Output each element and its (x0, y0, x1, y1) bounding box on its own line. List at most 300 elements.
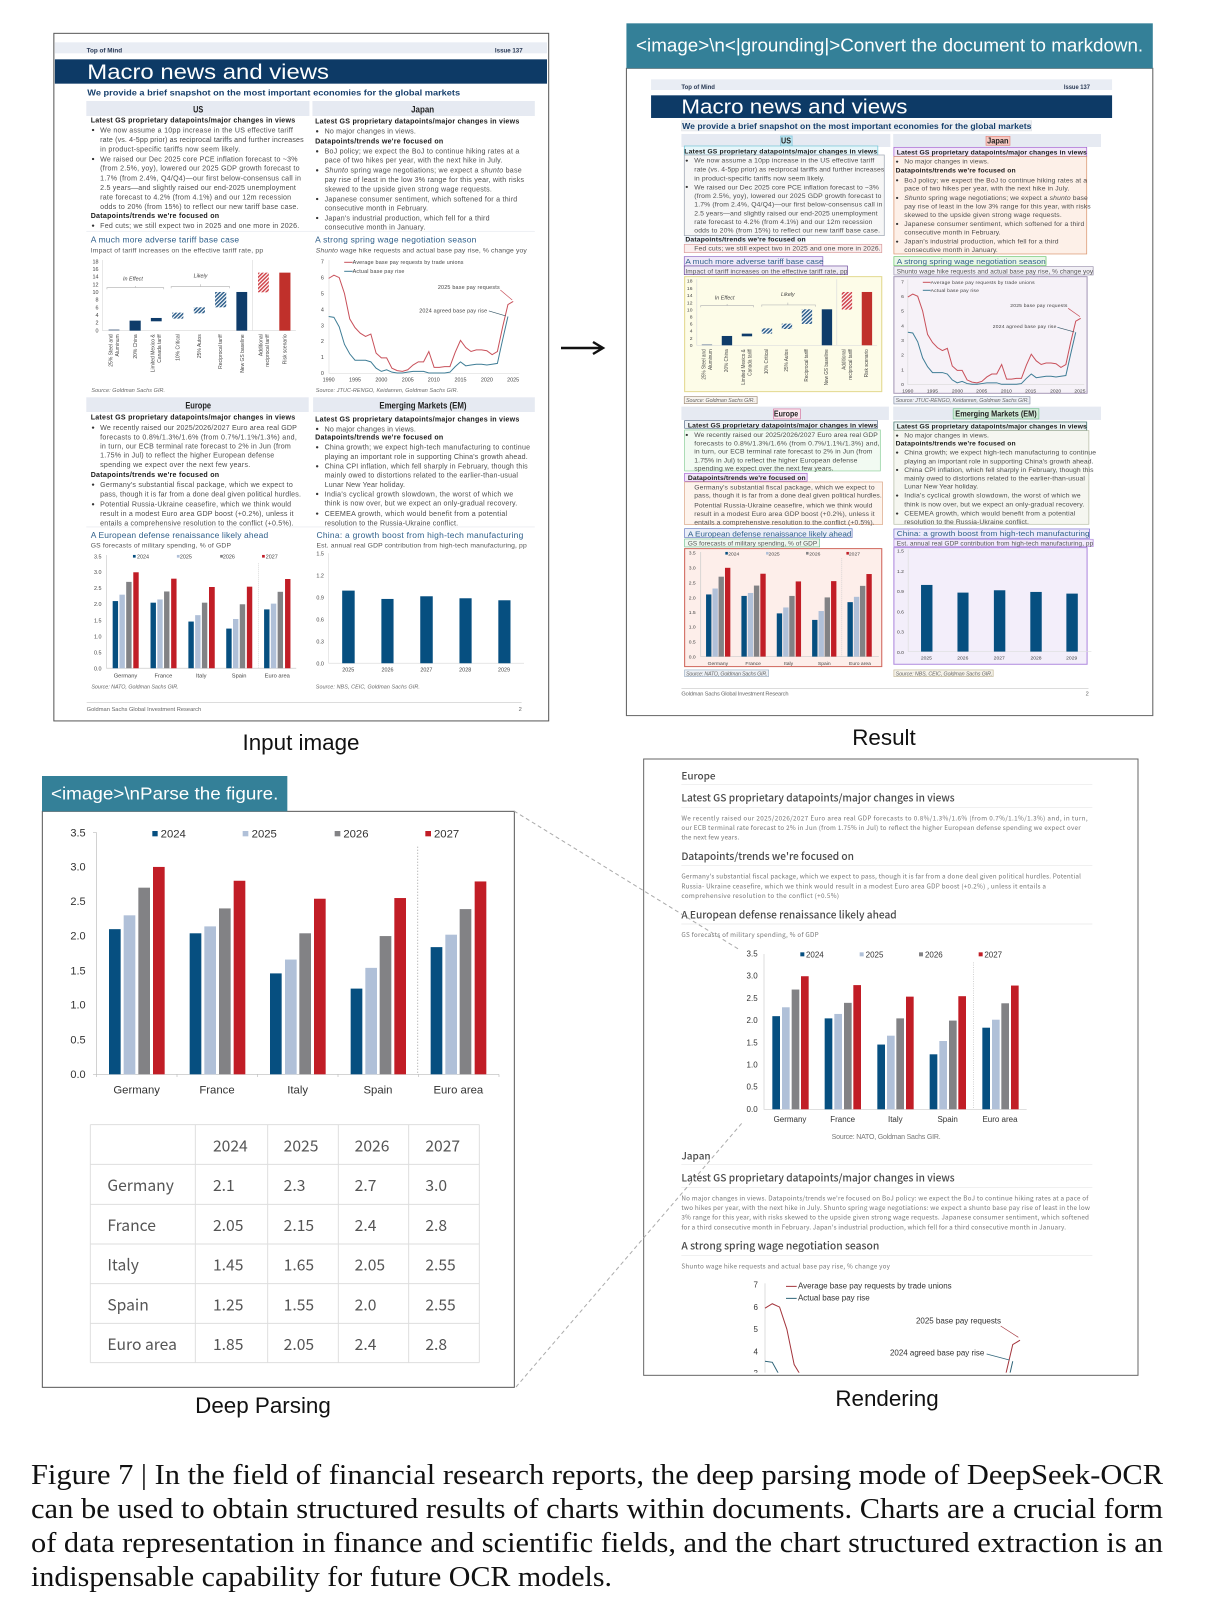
chart: European defense spending (91, 554, 296, 691)
chart: shunto wage line chart: 3 (321, 323, 324, 329)
grounding box: tariff chart: Aluminum (708, 349, 714, 370)
text block: Emerging Markets views: No major changes in views. (325, 426, 416, 433)
panel: result with grounding boxes: 2 (1086, 692, 1089, 698)
rendered bar chart: defense spending: Euro area (982, 1115, 1018, 1124)
text block: US views: odds to 20% (from 15%) to reflect our new tariff base case. (100, 204, 299, 211)
rendered bar chart: defense spending: 2026 (925, 950, 943, 959)
bar chart: military spending by country: 1.0 (70, 1000, 86, 1012)
chart: European defense spending: France (154, 673, 172, 679)
grounding box: wage line chart (894, 277, 1087, 394)
text block: Emerging Markets views: CEEMEA growth, which would benefit from a potential (325, 511, 508, 518)
chart: European defense spending: 3.5 (94, 554, 102, 560)
chart: tariff base case: 8 (95, 298, 98, 304)
panel: result with grounding boxes (626, 23, 1153, 716)
bar chart: military spending by country: 2025 (252, 829, 277, 841)
chart: tariff base case: 2 (95, 321, 98, 327)
grounding boxes: Emerging Markets text: mainly owed to distortions related to the earlier-than-usual (904, 475, 1085, 482)
chart: shunto wage line chart: 2000 (375, 377, 387, 383)
chart: European defense spending: 1.5 (94, 618, 102, 624)
rendered section: Japan: for a third consecutive month in February. Japan's industrial production, which fell for a third consecutive month in January. (681, 1222, 1066, 1231)
grounding boxes: US text: rate (vs. 4-5pp prior) as reciprocal tariffs and further increases (694, 166, 885, 173)
figure caption: indispensable capability for future OCR models. (31, 1562, 612, 1593)
rendered line chart: wage negotiations (cropped) (754, 1282, 1020, 1373)
chart: shunto wage line chart: 6 (321, 276, 324, 282)
panel: input image document: Japan (411, 104, 434, 114)
rendered bar chart: defense spending: 1.5 (747, 1038, 758, 1047)
grounding boxes: US text: 2.5 years—and slightly raised our end-2025 unemployment (694, 210, 878, 217)
rendered section: Japan: No major changes in views. Datapoints/trends we're focused on BoJ policy: we expect the BoJ to continue hiking rates at a pace of (681, 1193, 1089, 1202)
chart: shunto wage line chart: 2005 (402, 377, 414, 383)
text block: Emerging Markets views: resolution to the Russia-Ukraine conflict. (325, 520, 458, 527)
rendered section: Europe: We recently raised our 2025/2026/2027 Euro area real GDP forecasts to 0.8%/1.3%/1.6% (from 0.7%/1.1%/1.3%) and, in turn, (681, 813, 1088, 822)
grounding box: tariff chart: 14 (687, 293, 693, 299)
text block: US views: Fed cuts; we still expect two in 2025 and one more in 2026. (100, 223, 299, 230)
grounding boxes: Europe text: GS forecasts of military spending, % of GDP (688, 540, 817, 547)
chart: China high-tech GDP contribution: 2027 (420, 668, 432, 674)
chart: tariff base case: New GS baseline (240, 334, 246, 373)
chart: tariff base case: 20% China (133, 334, 139, 359)
text block: US views (91, 118, 304, 230)
chart: tariff base case: Source: Goldman Sachs GIR. (91, 388, 165, 394)
grounding boxes: US text: 1.7% (from 2.4%, Q4/Q4)—our first below-consensus call in (694, 202, 883, 209)
table: parsed chart values: 2025 (284, 1134, 318, 1157)
grounding box: wage line chart: 6 (901, 294, 904, 300)
chart: tariff base case: Aluminum (115, 334, 121, 356)
panel: result with grounding boxes: US (781, 136, 791, 146)
table: parsed chart values: 1.65 (284, 1253, 314, 1276)
text block: Japan views: Datapoints/trends we're focused on (315, 138, 443, 145)
grounding boxes: US text: A much more adverse tariff base case (685, 257, 824, 266)
table: parsed chart values: France (107, 1213, 156, 1236)
chart: tariff base case: 16 (92, 267, 98, 273)
panel: input image document: Shunto wage hike requests and actual base pay rise, % change yoy (316, 247, 527, 254)
grounding boxes: Japan text (894, 147, 1094, 275)
chart: European defense spending: 0.0 (94, 666, 102, 672)
rendered section: Europe: Russia- Ukraine ceasefire, which we think would result in a modest Euro area GDP boost (+0.2%) , unless it entails a (681, 881, 1046, 890)
panel: input image document: Europe (185, 400, 211, 410)
caption: Rendering: Rendering (835, 1386, 939, 1411)
grounding boxes: US text: in product-specific tariffs now seem likely. (694, 175, 825, 182)
chart: shunto wage line chart: 4 (321, 307, 324, 313)
bar chart: military spending by country: Italy (287, 1085, 308, 1097)
panel: result with grounding boxes: Goldman Sachs Global Investment Research (681, 692, 789, 698)
grounding boxes: Europe text: Datapoints/trends we're focused on (688, 475, 806, 482)
table: parsed chart values: 2024 (213, 1134, 248, 1157)
grounding box: tariff chart: Reciprocal tariff (804, 349, 810, 382)
chart: European defense spending: 0.5 (94, 650, 102, 656)
panel: result with grounding boxes: Emerging Markets (EM) (955, 409, 1037, 419)
panel: result with grounding boxes: Issue 137 (1064, 84, 1090, 91)
text block: Europe views: 1.75% in Jul) to reflect the higher European defense (100, 453, 274, 460)
chart: shunto wage line chart: 7 (321, 260, 324, 266)
chart: tariff base case: 6 (95, 305, 98, 311)
chart: tariff base case: 12 (92, 282, 98, 288)
bar chart: military spending by country: 2.0 (70, 931, 86, 943)
grounding boxes: Japan text: Shunto spring wage negotiations; we expect a shunto base (904, 195, 1088, 202)
table: parsed chart values: 2.8 (425, 1332, 447, 1355)
chart: China high-tech GDP contribution: 2028 (459, 668, 471, 674)
text block: Japan views: BoJ policy; we expect the BoJ to continue hiking rates at a (325, 149, 519, 156)
grounding boxes: Japan text: consecutive month in February. (904, 229, 1001, 236)
grounding boxes: Emerging Markets text: playing an important role in supporting China's growth ahead. (904, 458, 1094, 465)
rendered section: Japan: Japan (681, 1147, 711, 1162)
grounding box: wage line chart: 2005 (976, 388, 988, 394)
grounding boxes: Japan text: consecutive month in January. (904, 247, 998, 254)
grounding box: tariff chart: 12 (687, 300, 693, 306)
text block: Emerging Markets views: Datapoints/trends we're focused on (315, 435, 443, 442)
bar chart: military spending by country: Spain (364, 1085, 392, 1097)
chart: shunto wage line chart: 2025 base pay requests (438, 285, 500, 291)
chart: tariff base case: Likely (194, 273, 208, 279)
chart: China high-tech GDP contribution: 0.3 (316, 639, 324, 645)
grounding box: European defense chart: 3.5 (689, 551, 696, 557)
bar chart: military spending by country: 3.5 (70, 827, 86, 839)
caption: Input image: Input image (242, 730, 360, 755)
panel: result with grounding boxes: Source: NATO, Goldman Sachs GIR. (686, 671, 767, 677)
grounding box: China chart: 0.3 (897, 630, 904, 636)
grounding box: wage line chart: 2015 (1025, 388, 1037, 394)
bar chart: military spending by country: 3.0 (70, 861, 86, 873)
chart: China high-tech GDP contribution: 2026 (381, 668, 393, 674)
grounding boxes: Japan text: Shunto wage hike requests and actual base pay rise, % change yoy (897, 268, 1094, 275)
table: parsed chart values: 2.7 (355, 1173, 376, 1196)
grounding boxes: US text: odds to 20% (from 15%) to reflect our new tariff base case. (694, 228, 880, 235)
text block: US views: Latest GS proprietary datapoints/major changes in views (91, 118, 295, 125)
chart: European defense spending: Euro area (265, 673, 291, 679)
text block: Emerging Markets views: China CPI inflation, which fell sharply in February, though this (325, 464, 528, 471)
chart: shunto wage line chart: 5 (321, 291, 324, 297)
grounding boxes: Emerging Markets text: No major changes in views. (904, 433, 989, 440)
rendered section: Europe: Datapoints/trends we're focused on (681, 848, 854, 863)
text block: Europe views: Potential Russia-Ukraine ceasefire, which we think would (100, 502, 291, 509)
grounding box: tariff chart: 25% Autos (784, 349, 790, 372)
rendered bar chart: defense spending: Source: NATO, Goldman Sachs GIR. (832, 1134, 941, 1141)
rendered bar chart: defense spending: 2.0 (747, 1016, 758, 1025)
table: parsed chart values: Italy (107, 1253, 139, 1276)
text block: US views: We now assume a 10pp increase in the US effective tariff (100, 127, 293, 134)
text block: Emerging Markets views: playing an important role in supporting China's growth ahead. (325, 454, 528, 461)
chart: tariff base case: Reciprocal tariff (218, 334, 224, 369)
panel: input image document: Goldman Sachs Global Investment Research (87, 707, 201, 713)
rendered bar chart: defense spending: 3.5 (747, 950, 758, 959)
rendered bar chart: defense spending: 0.5 (747, 1083, 758, 1092)
chart: shunto wage line chart: 2 (321, 339, 324, 345)
grounding box: wage line chart: 4 (901, 323, 904, 329)
rendered bar chart: defense spending: 1.0 (747, 1060, 758, 1069)
bar chart: military spending by country: 1.5 (70, 965, 86, 977)
table: parsed chart values: 2.3 (284, 1173, 305, 1196)
grounding boxes: US text: We raised our Dec 2025 core PCE inflation forecast to ~3% (694, 184, 879, 191)
panel: rendering output (644, 759, 1138, 1440)
grounding box: European defense chart: 2026 (809, 551, 821, 557)
rendered line chart: wage negotiations (cropped): Actual base pay rise (798, 1294, 870, 1303)
chart: European defense spending: Italy (196, 673, 207, 679)
figure caption: of data representation in finance and scientific fields, and the chart structured extraction is an (31, 1528, 1163, 1559)
grounding box: wage line chart: Actual base pay rise (931, 288, 979, 294)
chart: shunto wage line chart: 0 (321, 371, 324, 377)
text block: Emerging Markets views: mainly owed to distortions related to the earlier-than-usual (325, 473, 518, 480)
chart: shunto wage line chart: 1995 (349, 377, 361, 383)
rendered section: Japan: 3% range for this year, with risks skewed to the upside given strong wage requests. Japanese consumer sentiment, which softened (681, 1213, 1089, 1222)
chart: tariff base case: 0 (95, 328, 98, 334)
panel: result with grounding boxes: Europe (774, 409, 798, 419)
grounding boxes: Europe text (685, 421, 882, 547)
chart: tariff base case: 14 (92, 275, 98, 281)
table: parsed chart values (90, 1125, 479, 1363)
text block: Japan views: Japan's industrial production, which fell for a third (325, 215, 490, 222)
chart: China high-tech GDP contribution: 1.2 (316, 573, 324, 579)
grounding box: China chart: 1.2 (897, 569, 904, 575)
bar chart: military spending by country: 2.5 (70, 896, 86, 908)
bar chart: military spending by country: Germany (113, 1085, 160, 1097)
chart: tariff base case: reciprocal tariff (265, 334, 271, 367)
grounding boxes: Emerging Markets text: Latest GS proprietary datapoints/major changes in views (897, 424, 1087, 431)
grounding boxes: US text: We now assume a 10pp increase in the US effective tariff (694, 158, 874, 165)
table: parsed chart values: 2.0 (355, 1292, 376, 1315)
grounding boxes: Europe text: entails a comprehensive resolution to the conflict (+0.5%). (694, 519, 875, 526)
bar chart: military spending by country: 2026 (343, 829, 369, 841)
grounding box: China chart: 2027 (994, 655, 1005, 661)
text block: Japan views: Japanese consumer sentiment, which softened for a third (325, 196, 517, 203)
grounding box: tariff chart: 20% China (724, 349, 730, 372)
text block: Europe views: Datapoints/trends we're focused on (91, 472, 219, 479)
connector lines: deep parsing to rendered chart (514, 811, 742, 1387)
grounding box: European defense chart: 2025 (769, 551, 780, 557)
chart: European defense spending: 3.0 (94, 570, 102, 576)
rendered section: Europe: Latest GS proprietary datapoints/major changes in views (681, 790, 955, 805)
chart: tariff base case: 25% Autos (197, 334, 203, 358)
grounding boxes: Europe text: result in a modest Euro area GDP boost (+0.2%), unless it (694, 511, 875, 518)
grounding boxes: Emerging Markets text: Datapoints/trends we're focused on (896, 441, 1016, 448)
chart: tariff base case: 4 (95, 313, 98, 319)
grounding box: wage line chart: 2020 (1050, 388, 1062, 394)
rendered section: Japan: A strong spring wage negotiation season (681, 1238, 879, 1253)
chart: shunto wage line chart: Source: JTUC-RENGO, Keidanren, Goldman Sachs GIR. (316, 388, 458, 394)
bar chart: military spending by country: 0.0 (70, 1069, 86, 1081)
panel: result with grounding boxes: Japan (987, 136, 1009, 146)
grounding boxes: Emerging Markets text (894, 422, 1096, 547)
grounding boxes: US text: Impact of tariff increases on the effective tariff rate, pp (685, 268, 848, 275)
rendered line chart: wage negotiations (cropped): 2024 agreed base pay rise (890, 1348, 985, 1357)
grounding boxes: Japan text: BoJ policy; we expect the BoJ to continue hiking rates at a (904, 177, 1087, 184)
grounding box: wage line chart: 2024 agreed base pay rise (993, 324, 1057, 330)
grounding box: China chart: 2028 (1030, 655, 1042, 661)
grounding boxes: Japan text: skewed to the upside given strong wage requests. (904, 212, 1062, 219)
rendered bar chart: defense spending: Germany (774, 1115, 806, 1124)
chart: tariff base case: Risk scenario (283, 334, 289, 364)
panel: input image document: A strong spring wage negotiation season (315, 235, 477, 245)
grounding boxes: US text: rate forecast to 4.2% (from 4.1%) and our 12m recession (694, 219, 873, 226)
rendered bar chart: defense spending: Spain (937, 1115, 958, 1124)
grounding box: European defense chart: 2.0 (689, 595, 696, 601)
grounding box: wage line chart: 2025 (1074, 388, 1086, 394)
table: parsed chart values: 2027 (425, 1134, 460, 1157)
prompt header: convert to markdown: <image>\n<|grounding|>Convert the document to markdown. (636, 35, 1143, 56)
table: parsed chart values: 1.55 (284, 1292, 314, 1315)
panel: input image document: We provide a brief snapshot on the most important economies for the global markets (87, 88, 461, 98)
text block: US views: We raised our Dec 2025 core PCE inflation forecast to ~3% (100, 156, 298, 163)
text block: US views: Datapoints/trends we're focused on (91, 213, 219, 220)
panel: result with grounding boxes: We provide a brief snapshot on the most important economies for the global markets (682, 122, 1032, 131)
grounding boxes: Japan text: No major changes in views. (904, 159, 989, 166)
grounding boxes: Emerging Markets text: India's cyclical growth slowdown, the worst of which we (904, 493, 1081, 500)
text block: Japan views: consecutive month in February. (325, 205, 428, 212)
chart: tariff base case: 10 (92, 290, 98, 296)
grounding box: China chart: 0.9 (897, 589, 904, 595)
rendered section: Europe: A European defense renaissance likely ahead (681, 906, 897, 921)
rendered section: Europe: GS forecasts of military spending, % of GDP (681, 930, 819, 939)
table: parsed chart values: 2.4 (355, 1332, 377, 1355)
chart: China high-tech GDP contribution: 0.0 (316, 661, 324, 667)
chart: China high-tech GDP contribution (316, 552, 524, 691)
grounding box: China chart: 2029 (1066, 655, 1078, 661)
chart: shunto wage line chart: 1 (321, 355, 324, 361)
grounding boxes: Europe text: in turn, our ECB terminal rate forecast to 2% in Jun (from (694, 449, 873, 456)
grounding box: tariff chart: Canada tariff (747, 349, 753, 376)
text block: US views: in product-specific tariffs now seem likely. (100, 147, 240, 154)
text block: US views: rate (vs. 4-5pp prior) as reciprocal tariffs and further increases (100, 137, 304, 144)
rendered section: Japan: Latest GS proprietary datapoints/major changes in views (681, 1170, 955, 1185)
grounding box: tariff chart: Additional (842, 349, 848, 370)
table: parsed chart values: 3.0 (425, 1173, 447, 1196)
rendered section: Europe: our ECB terminal rate forecast to 2% in Jun (from 1.75% in Jul) to reflect the higher European defense spending we expect over (681, 823, 1081, 832)
caption: Result: Result (852, 725, 917, 750)
grounding box: China chart: 2025 (921, 655, 932, 661)
rendered bar chart: defense spending: 2.5 (747, 994, 758, 1003)
panel: input image document (54, 33, 549, 721)
chart: shunto wage line chart: Actual base pay rise (353, 269, 404, 275)
rendered bar chart: defense spending: 2024 (806, 950, 824, 959)
rendered line chart: wage negotiations (cropped): 4 (754, 1347, 759, 1356)
rendered bar chart: defense spending: Italy (888, 1115, 903, 1124)
grounding boxes: Europe text: A European defense renaissance likely ahead (688, 530, 851, 538)
chart: European defense spending: 2.0 (94, 602, 102, 608)
grounding boxes: Emerging Markets text: China CPI inflation, which fell sharply in February, though this (904, 467, 1094, 474)
rendered bar chart: defense spending: 2027 (984, 950, 1003, 959)
grounding boxes: Europe text: 1.75% in Jul) to reflect the higher European defense (694, 457, 858, 464)
grounding box: China chart: 2026 (957, 655, 969, 661)
grounding box: tariff chart: 4 (690, 329, 693, 335)
panel: result with grounding boxes: Macro news and views (681, 95, 907, 118)
table: parsed chart values: Euro area (107, 1332, 177, 1355)
grounding boxes: US text: Datapoints/trends we're focused on (685, 236, 806, 243)
rendered bar chart: defense spending: 2025 (866, 950, 884, 959)
chart: tariff base case: 25% Steel and (108, 334, 114, 367)
chart: shunto wage line chart: 2024 agreed base pay rise (419, 308, 487, 314)
grounding boxes: Emerging Markets text: China growth; we expect high-tech manufacturing to continue (904, 450, 1096, 457)
grounding box: wage line chart: 0 (901, 382, 904, 388)
table: parsed chart values: 2.05 (355, 1253, 385, 1276)
bar chart: military spending by country: 0.5 (70, 1034, 86, 1046)
chart: European defense spending: 2026 (223, 554, 235, 560)
grounding box: China chart (894, 548, 1091, 664)
text block: Japan views: consecutive month in January. (325, 225, 425, 232)
grounding box: China chart: 0.6 (897, 609, 904, 615)
grounding box: European defense chart: 2024 (728, 551, 740, 557)
grounding box: China chart: 0.0 (897, 650, 904, 656)
grounding box: tariff chart: 8 (690, 314, 693, 320)
text block: Emerging Markets views: China growth; we expect high-tech manufacturing to continue (325, 445, 530, 452)
grounding boxes: Europe text: Germany's substantial fiscal package, which we expect to (694, 484, 875, 491)
chart: shunto wage line chart: Average base pay requests by trade unions (353, 260, 464, 266)
grounding boxes: Japan text: A strong spring wage negotiation season (897, 257, 1046, 266)
text block: Europe views: entails a comprehensive resolution to the conflict (+0.5%). (100, 520, 294, 527)
text block: US views: 1.7% (from 2.4%, Q4/Q4)—our first below-consensus call in (100, 175, 301, 182)
grounding boxes: US text (684, 146, 885, 275)
grounding box: wage line chart: 5 (901, 309, 904, 315)
chart: tariff base case: 10% Critical (175, 334, 181, 361)
grounding box: wage line chart: Average base pay requests by trade unions (931, 280, 1035, 286)
panel: input image document: China: a growth boost from high-tech manufacturing (316, 530, 524, 540)
chart: China high-tech GDP contribution: 2029 (498, 668, 510, 674)
chart: European defense spending: 2025 (180, 554, 192, 560)
rendered bar chart: defense spending (747, 950, 1027, 1141)
grounding box: European defense chart (685, 549, 882, 667)
grounding boxes: Japan text: pace of two hikes per year, with the next hike in July. (904, 185, 1069, 192)
text block: Japan views: Shunto spring wage negotiations; we expect a shunto base (325, 168, 522, 175)
chart: shunto wage line chart: 1990 (323, 377, 335, 383)
table: parsed chart values: Spain (107, 1292, 149, 1315)
grounding boxes: US text: Latest GS proprietary datapoints/major changes in views (684, 149, 877, 156)
panel: input image document: A much more adverse tariff base case (91, 235, 239, 245)
rendered section: Europe: comprehensive resolution to the conflict (+0.5%) (681, 891, 839, 900)
chart: tariff base case (91, 259, 296, 394)
panel: result with grounding boxes: Source: Goldman Sachs GIR. (686, 398, 755, 404)
table: parsed chart values: 2.4 (355, 1213, 377, 1236)
bar chart: military spending by country (70, 827, 499, 1097)
chart: shunto wage line chart (316, 260, 519, 394)
text block: US views: rate forecast to 4.2% (from 4.1%) and our 12m recession (100, 194, 291, 201)
grounding box: wage line chart: 7 (901, 279, 904, 285)
grounding box: wage line chart: 3 (901, 338, 904, 344)
chart: shunto wage line chart: 2025 (507, 377, 519, 383)
grounding box: European defense chart: Euro area (849, 661, 871, 667)
grounding box: tariff chart: reciprocal tariff (848, 349, 854, 380)
panel: deep parsing (42, 776, 514, 1387)
chart: tariff base case: Additional (258, 334, 264, 356)
grounding box: tariff chart: 16 (687, 286, 693, 292)
chart: tariff base case: 18 (92, 259, 98, 265)
text block: Japan views: No major changes in views. (325, 129, 416, 136)
chart: China high-tech GDP contribution: 0.6 (316, 617, 324, 623)
grounding box: tariff chart: 25% Steel and (702, 349, 708, 380)
table: parsed chart values: 2.55 (425, 1292, 456, 1315)
panel: input image document: Issue 137 (495, 47, 523, 54)
table: parsed chart values: 2.55 (425, 1253, 456, 1276)
grounding boxes: Emerging Markets text: CEEMEA growth, which would benefit from a potential (904, 511, 1076, 518)
rendered section: Europe (681, 767, 1092, 939)
grounding box: wage line chart: 2010 (1001, 388, 1012, 394)
panel: result with grounding boxes: Top of Mind (681, 84, 715, 91)
text block: Europe views: pass, though it is far from a done deal given political hurdles. (100, 491, 301, 498)
grounding box: tariff chart: Limited Mexico & (741, 349, 747, 385)
text block: Europe views: forecasts to 0.8%/1.3%/1.6% (from 0.7%/1.1%/1.3%) and, (100, 434, 297, 441)
chart: China high-tech GDP contribution: Source: NBS, CEIC, Goldman Sachs GIR. (316, 685, 420, 691)
grounding box: European defense chart: Spain (818, 661, 831, 667)
panel: input image document: US (193, 104, 203, 114)
grounding box: European defense chart: 1.0 (689, 625, 696, 631)
grounding box: European defense chart: 1.5 (689, 610, 696, 616)
grounding box: tariff chart: 6 (690, 322, 693, 328)
prompt tab: parse the figure: <image>\nParse the figure. (51, 783, 278, 803)
bar chart: military spending by country: 2027 (434, 829, 459, 841)
grounding boxes: Japan text: Latest GS proprietary datapoints/major changes in views (897, 150, 1087, 157)
grounding box: tariff chart: 18 (687, 279, 693, 285)
grounding box: wage line chart: 2000 (952, 388, 963, 394)
text block: Europe views: We recently raised our 2025/2026/2027 Euro area real GDP (100, 425, 297, 432)
table: parsed chart values: 2026 (355, 1134, 389, 1157)
table: parsed chart values: Germany (107, 1173, 174, 1196)
